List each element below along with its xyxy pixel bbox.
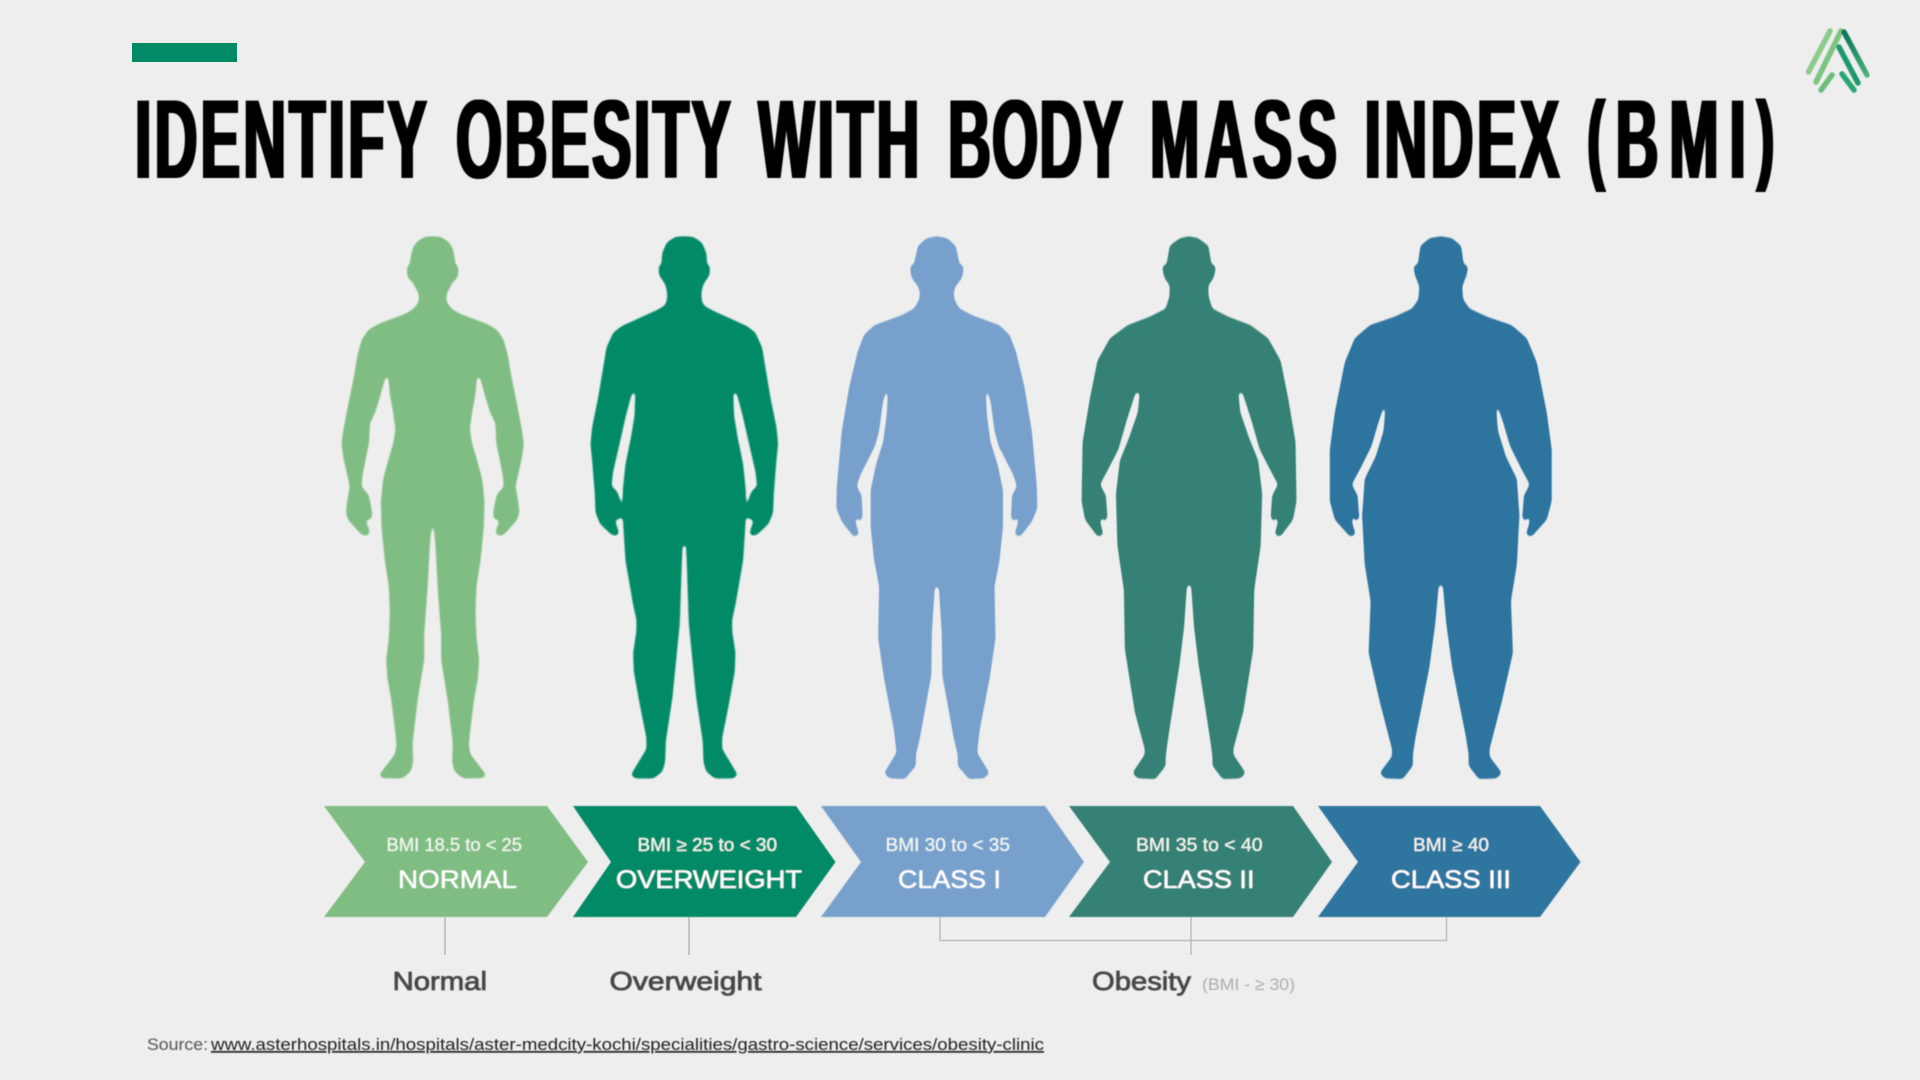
title: WITH	[758, 77, 919, 202]
chevron: class I: BMI 30 to < 35	[886, 835, 1010, 855]
title: BODY	[948, 77, 1123, 202]
chevron: normal	[324, 806, 588, 917]
figure: normal silhouette	[342, 237, 523, 778]
chevron: class III: BMI ≥ 40	[1413, 835, 1489, 855]
title: INDEX	[1364, 77, 1559, 202]
chevron: class III: CLASS III	[1391, 866, 1511, 894]
label: overweight: Overweight	[610, 966, 762, 996]
source line: www.asterhospitals.in/hospitals/aster-medcity-kochi/specialities/gastro-science/services/obesity-clinic	[210, 1035, 1045, 1054]
chevron: overweight: OVERWEIGHT	[616, 866, 802, 894]
label: normal: Normal	[393, 966, 487, 996]
chevron: class II	[1069, 806, 1332, 917]
connector: obesity bracket	[940, 917, 1446, 955]
figure: overweight silhouette	[591, 237, 778, 778]
chevron: class I	[821, 806, 1084, 917]
chevron: normal: NORMAL	[398, 866, 517, 894]
title	[135, 77, 1774, 202]
figure: class I silhouette	[837, 237, 1037, 779]
chevron: overweight	[573, 806, 836, 917]
source line: Source:	[147, 1035, 208, 1054]
icon: brand logo	[1808, 31, 1867, 90]
chevron: class III	[1318, 806, 1580, 917]
title: OBESITY	[456, 77, 731, 202]
chevron: normal: BMI 18.5 to < 25	[386, 835, 522, 855]
label: obesity: Obesity	[1092, 966, 1191, 996]
title: (	[1587, 81, 1605, 192]
figure: class III silhouette	[1330, 237, 1551, 779]
chevron: class II: CLASS II	[1143, 866, 1254, 894]
connector: normal	[444, 917, 446, 955]
chevron: overweight: BMI ≥ 25 to < 30	[638, 835, 777, 855]
title: MASS	[1150, 77, 1337, 202]
label: obesity BMI range: (BMI - ≥ 30)	[1202, 975, 1295, 994]
connector: overweight	[688, 917, 690, 955]
accent bar	[132, 43, 237, 62]
title: BMI	[1616, 77, 1746, 202]
chevron: class I: CLASS I	[898, 866, 1001, 894]
chevron: class II: BMI 35 to < 40	[1136, 835, 1262, 855]
title: )	[1757, 81, 1774, 192]
title: IDENTIFY	[135, 77, 427, 202]
figure: class II silhouette	[1082, 237, 1296, 779]
